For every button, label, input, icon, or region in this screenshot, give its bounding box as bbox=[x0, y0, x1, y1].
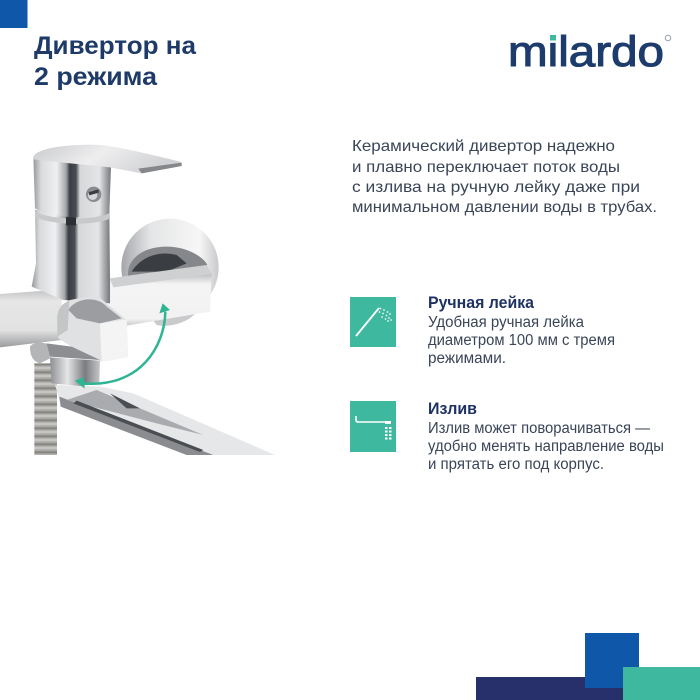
wall flange bbox=[121, 219, 219, 326]
side screw bbox=[86, 187, 101, 202]
icon: hand shower bbox=[350, 297, 396, 347]
feature: hand shower text: Удобная ручная лейка bbox=[428, 314, 584, 331]
upper cartridge bbox=[33, 157, 111, 217]
title: Дивертор на bbox=[34, 32, 197, 60]
logo: milardo: milardo bbox=[508, 28, 664, 76]
feature: hand shower text: режимами. bbox=[428, 350, 506, 367]
spout bbox=[55, 385, 275, 455]
feature: hand shower text: диаметром 100 мм с тремя bbox=[428, 332, 615, 349]
diverter collar bbox=[30, 343, 100, 386]
lever handle bbox=[33, 145, 182, 173]
connecting block to wall bbox=[110, 273, 212, 327]
intro paragraph: с излива на ручную лейку даже при bbox=[352, 179, 640, 196]
intro paragraph: Керамический дивертор надежно bbox=[352, 138, 615, 155]
arrow: diverter rotation bbox=[75, 303, 170, 389]
left arm bbox=[0, 289, 62, 347]
feature: hand shower text: Ручная лейка bbox=[428, 294, 535, 312]
intro paragraph: минимальном давлении воды в трубах. bbox=[352, 199, 657, 216]
corner accent: bottom right bbox=[476, 633, 700, 700]
title bbox=[34, 32, 197, 91]
feature: spout text: Излив может поворачиваться — bbox=[428, 420, 650, 437]
title: 2 режима bbox=[34, 63, 158, 91]
icon: spout bbox=[350, 401, 396, 452]
intro paragraph: и плавно переключает поток воды bbox=[352, 159, 620, 176]
lower body bbox=[32, 210, 110, 303]
cartridge ring shadow bbox=[35, 212, 109, 224]
corner accent: top left bbox=[0, 0, 28, 28]
hose bbox=[34, 363, 57, 455]
feature: spout text bbox=[428, 400, 664, 473]
faucet photo illustration bbox=[0, 145, 275, 455]
feature: spout text: удобно менять направление воды bbox=[428, 438, 664, 455]
feature: spout text: и прятать его под корпус. bbox=[428, 456, 604, 473]
intro paragraph bbox=[352, 138, 657, 216]
feature: hand shower text bbox=[428, 294, 615, 367]
feature: spout text: Излив bbox=[428, 400, 477, 418]
diverter body bbox=[57, 295, 128, 362]
